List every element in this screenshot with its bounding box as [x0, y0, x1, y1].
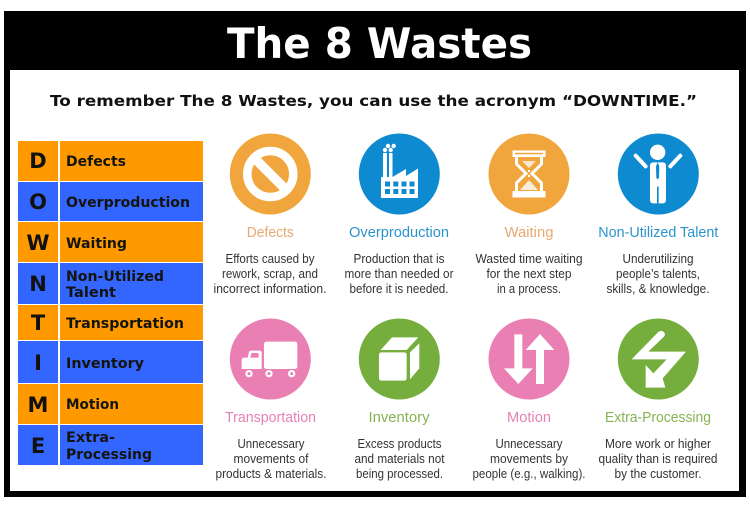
description: skills, & knowledge.: [606, 282, 710, 296]
row I: Inventory: Inventory: [66, 356, 145, 372]
row W: Waiting: W: [26, 231, 50, 255]
row I: Inventory: I: [34, 351, 42, 375]
heading: Extra-Processing: [605, 409, 711, 426]
description: in a process.: [497, 282, 561, 296]
heading: Overproduction: [349, 224, 449, 241]
row M: Motion: [18, 384, 203, 424]
heading: Non-Utilized Talent: [598, 224, 719, 241]
row O: Overproduction: [18, 182, 203, 221]
icon: hourglass: [488, 134, 570, 214]
panel: Inventory: [354, 318, 445, 481]
row N: Non-Utilized Talent: [18, 263, 203, 304]
row I: Inventory: [18, 341, 203, 383]
description: movements by: [490, 452, 569, 466]
description: people’s talents,: [616, 267, 700, 281]
panel: Transportation: [216, 318, 326, 481]
description: [606, 252, 710, 296]
icon: up and down arrows: [488, 318, 570, 400]
row M: Motion: Motion: [66, 397, 119, 413]
row N: Non-Utilized Talent: Non-Utilized: [66, 269, 164, 285]
description: Production that is: [354, 252, 444, 266]
panel: Non-Utilized Talent: [598, 134, 719, 296]
row D: Defects: D: [29, 149, 47, 173]
description: [598, 437, 718, 481]
row T: Transportation: T: [31, 311, 46, 335]
description: Unnecessary: [238, 437, 305, 451]
row N: Non-Utilized Talent: Talent: [66, 285, 116, 301]
description: before it is needed.: [350, 282, 448, 296]
description: [216, 437, 326, 481]
icon: prohibition sign: [230, 134, 311, 214]
icon: factory: [359, 134, 440, 214]
heading: Waiting: [504, 224, 554, 241]
panel: Waiting: [476, 134, 583, 296]
description: [214, 252, 326, 296]
description: being processed.: [356, 467, 443, 481]
description: more than needed or: [344, 267, 454, 281]
description: by the customer.: [614, 467, 702, 481]
description: More work or higher: [605, 437, 711, 451]
panel: Motion: [472, 318, 586, 481]
icon: zigzag arrow: [618, 318, 699, 400]
heading: Transportation: [225, 409, 316, 426]
heading: Motion: [507, 409, 551, 426]
description: for the next step: [486, 267, 572, 281]
panel: DOWNTIME acronym table: [18, 141, 203, 465]
description: products & materials.: [216, 467, 326, 481]
row E: Extra-Processing: E: [31, 434, 45, 458]
title: The 8 Wastes: [227, 19, 532, 68]
description: incorrect information.: [214, 282, 326, 296]
row O: Overproduction: Overproduction: [66, 195, 190, 211]
description: rework, scrap, and: [222, 267, 318, 281]
description: [472, 437, 586, 481]
row N: Non-Utilized Talent: N: [29, 272, 47, 296]
description: Excess products: [358, 437, 442, 451]
panel: Extra-Processing: [598, 318, 718, 481]
description: Efforts caused by: [226, 252, 315, 266]
panel: Defects: [214, 134, 326, 296]
row T: Transportation: [18, 305, 203, 340]
row D: Defects: Defects: [66, 154, 126, 170]
description: movements of: [234, 452, 309, 466]
heading: Defects: [247, 224, 294, 241]
heading: Inventory: [368, 409, 430, 426]
description: people (e.g., walking).: [472, 467, 586, 481]
icon: box: [359, 318, 440, 400]
icon: truck: [230, 318, 311, 400]
icon: person with raised arms: [618, 134, 699, 214]
description: [476, 252, 583, 296]
row W: Waiting: [18, 222, 203, 262]
row W: Waiting: Waiting: [66, 236, 127, 252]
panel: Overproduction: [344, 134, 454, 296]
description: quality than is required: [598, 452, 718, 466]
description: [344, 252, 454, 296]
row E: Extra-Processing: Extra-: [66, 430, 115, 446]
description: [354, 437, 445, 481]
row D: Defects: [18, 141, 203, 181]
description: Underutilizing: [622, 252, 694, 266]
row M: Motion: M: [28, 393, 48, 417]
description: Wasted time waiting: [476, 252, 583, 266]
row E: Extra-Processing: Processing: [66, 447, 152, 463]
subtitle: To remember The 8 Wastes, you can use the acronym “DOWNTIME.”: [50, 92, 697, 110]
row T: Transportation: Transportation: [66, 316, 184, 332]
description: and materials not: [354, 452, 445, 466]
row E: Extra-Processing: [18, 425, 203, 465]
description: Unnecessary: [496, 437, 563, 451]
row O: Overproduction: O: [29, 190, 47, 214]
